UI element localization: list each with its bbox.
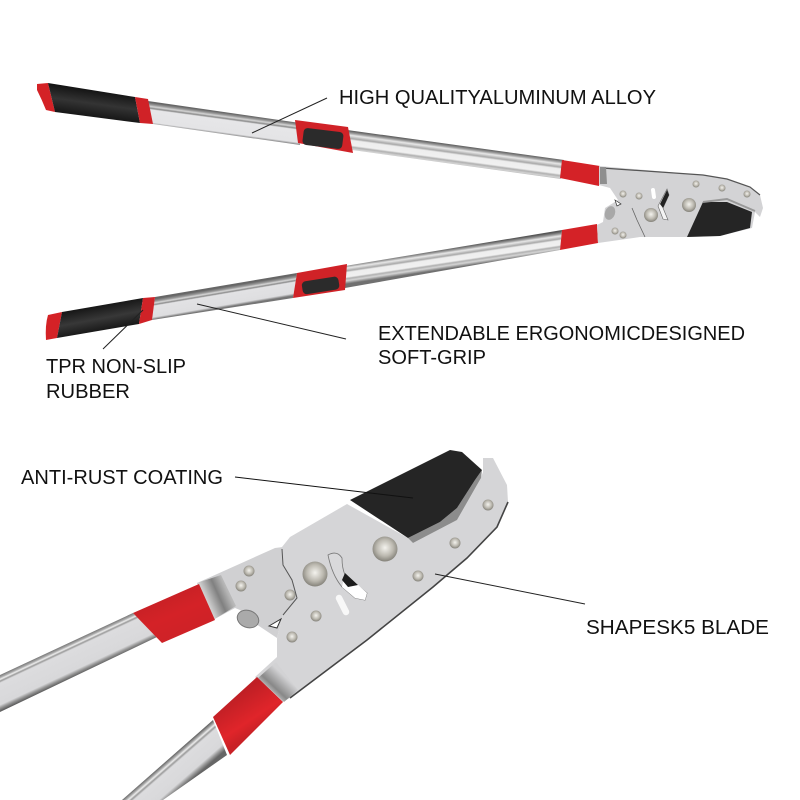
close-up lever gap bbox=[269, 619, 281, 628]
label: aluminum alloy: HIGH QUALITYALUMINUM ALLOY bbox=[339, 87, 656, 109]
upper handle bbox=[37, 83, 600, 186]
close-up red sleeves bbox=[133, 584, 283, 755]
close-up lower neck shading bbox=[258, 662, 298, 702]
leader: rubber bbox=[103, 310, 143, 349]
leader: blade bbox=[435, 574, 585, 604]
close-up black blade cover bbox=[350, 450, 482, 538]
close-up lower handle bbox=[122, 720, 227, 800]
close-up slots bbox=[328, 553, 367, 612]
close-up lever plate bbox=[197, 547, 297, 638]
leader: soft-grip bbox=[197, 304, 346, 339]
label: coating: ANTI-RUST COATING bbox=[21, 467, 223, 489]
close-up plate seam bbox=[282, 549, 297, 615]
close-up ratchet knob bbox=[235, 607, 261, 631]
label: soft-grip: EXTENDABLE ERGONOMICDESIGNED bbox=[378, 323, 745, 345]
label: soft-grip bbox=[378, 323, 745, 369]
lower handle bbox=[46, 224, 598, 340]
lopper: full tool view bbox=[37, 83, 763, 340]
leader: aluminum alloy bbox=[252, 98, 327, 133]
label: soft-grip: SOFT-GRIP bbox=[378, 347, 486, 369]
close-up blade band bbox=[408, 470, 482, 543]
close-up of cutting head bbox=[0, 450, 508, 800]
close-up upper handle bbox=[0, 613, 157, 712]
close-up lever neck shading bbox=[197, 575, 236, 620]
leader: coating bbox=[235, 477, 413, 498]
label: rubber bbox=[46, 356, 186, 403]
label: rubber: TPR NON-SLIP bbox=[46, 356, 186, 378]
cutting head bbox=[597, 166, 763, 243]
close-up main plate bbox=[255, 458, 508, 703]
label: blade: SHAPESK5 BLADE bbox=[586, 617, 769, 639]
close-up plate edge bbox=[290, 502, 508, 698]
label: rubber: RUBBER bbox=[46, 381, 130, 403]
close-up pivot bolts bbox=[302, 536, 398, 586]
close-up small bolts bbox=[236, 500, 494, 642]
